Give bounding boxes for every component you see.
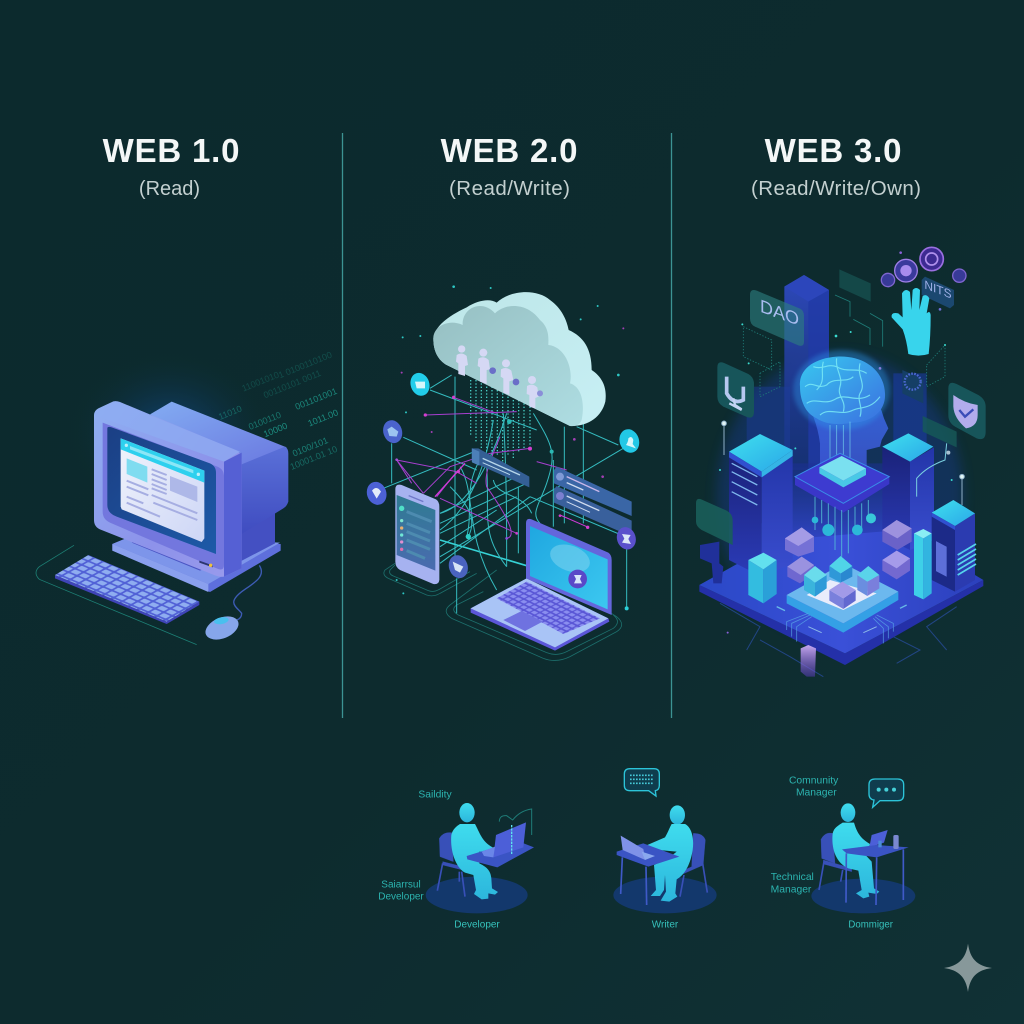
light columns [747,373,927,567]
label: role tag: Developer [378,892,424,903]
antenna left [722,421,726,455]
person [832,803,879,898]
label: Technical Manager [771,872,814,896]
DAO label panel [750,290,804,346]
tall background tower [784,275,829,470]
binary data stream: 11010 [217,403,243,422]
network lines magenta [397,397,588,538]
sparkle watermark [944,944,992,992]
central tier [787,563,898,633]
monitor stand base [112,533,281,592]
main platform [699,530,983,665]
binary data stream: 10000 [262,421,289,439]
data rain [471,380,530,463]
illustration: Web 3.0 decentralised city [696,247,986,677]
floor ellipse [613,877,717,913]
code hologram [499,809,532,835]
DAO label panel: DAO [760,295,799,330]
chair [819,833,852,890]
chair [677,833,707,897]
left server tower [729,434,793,577]
central chip slab [795,453,889,513]
caption: Dommiger: Dommiger [848,920,894,931]
brain [793,350,890,430]
holographic wire panels [743,295,945,397]
label: Technical Manager: Technical [771,872,814,883]
far right server tower [932,500,976,592]
binary data stream: 11001010 [240,370,281,394]
NFTs label panel [922,277,954,308]
column divider right [670,133,672,718]
microphone icon panel [717,362,754,418]
heading: Web 2.0: WEB 2.0 [441,132,578,169]
desk outline [36,545,197,645]
heading: Web 1.0: WEB 1.0 [103,132,240,169]
binary data stream [217,350,340,472]
power led [209,564,212,567]
chat bubble [624,769,659,796]
floor ellipse [426,877,528,913]
binary data stream: 1 0100110100 [277,350,333,380]
role: writer [613,769,717,931]
cloud [433,292,606,426]
label: role tag: Saiarrsul [381,879,421,890]
data panel top [839,269,871,302]
binary data stream: 00110101 0011 [262,368,322,400]
role: community manager [771,775,992,992]
cloud users [456,345,543,409]
mouse [202,612,242,644]
heading: Web 2.0: (Read/Write) [449,177,570,200]
power light [199,561,213,567]
label: Community Manager: Comnunity [789,775,839,786]
head silhouette [813,390,888,477]
network nodes [395,396,629,610]
desk and laptop [467,822,534,867]
monitor rear housing [150,402,288,562]
floor ellipse [811,879,915,913]
data panel right [923,416,957,447]
sparkle particles [719,251,953,634]
central blue haze [780,463,897,550]
lilac blocks [785,520,912,583]
person [647,805,693,902]
column divider left [342,133,344,718]
label: Technical Manager: Manager [771,885,812,896]
heading: Web 3.0: (Read/Write/Own) [751,177,921,200]
heading: Web 3.0 [751,132,921,200]
chat bubble [869,779,904,807]
label: role tag [378,879,424,903]
keyboard [55,555,199,624]
circuit traces under platform [720,603,957,677]
ambient glow [717,353,963,640]
label: Solidity: Saildity [418,790,452,801]
left dark connector [700,542,723,583]
network lines teal [383,375,633,613]
NFTs label panel: NITS [924,278,952,302]
mouse cable [234,565,261,620]
role: developer [378,790,534,931]
chair [437,833,473,897]
heading: Web 2.0 [441,132,578,200]
illustration: Web 2.0 cloud network [364,285,642,660]
social icon badges [364,370,642,581]
label: Community Manager: Manager [796,788,837,799]
binary data stream: 001101001 [294,386,338,412]
binary data stream: 0100110 [247,410,283,432]
heading: Web 1.0 [103,132,240,200]
monitor screen web page [121,438,204,542]
purple data bar [801,645,816,677]
token cubes [804,556,879,609]
label: Community Manager [789,775,839,799]
illustration: Web 1.0 retro computer [36,350,340,645]
caption: Developer: Developer [454,920,500,931]
caption: Writer: Writer [652,920,679,931]
binary data stream: 0100/101 [291,435,330,459]
person [451,803,498,899]
heading: Web 1.0: (Read) [139,178,200,200]
binary data stream: 10001.01 10 [289,444,339,472]
scattered data dots [396,285,624,594]
iso base outlines [384,563,622,660]
shield icon panel [948,383,986,439]
desk and laptop [617,836,679,867]
desk laptop and bottle [842,830,909,905]
phone [395,485,439,584]
desk legs [621,857,675,905]
small dashed data tile [902,370,923,403]
chat cards [472,448,632,537]
right server tower [882,433,950,550]
laptop [471,519,612,651]
hologram green panel [696,499,733,545]
binary data stream: 1011.00 [306,407,340,429]
heading: Web 3.0: WEB 3.0 [765,132,902,169]
monitor front bezel [94,401,242,577]
chip wires and nodes [812,497,876,557]
cyan pillars [748,529,932,603]
hand icon [892,288,931,356]
platform circuitry [777,605,907,643]
crypto coins [881,247,966,287]
neck data lines [830,422,850,460]
antenna right [960,474,964,505]
